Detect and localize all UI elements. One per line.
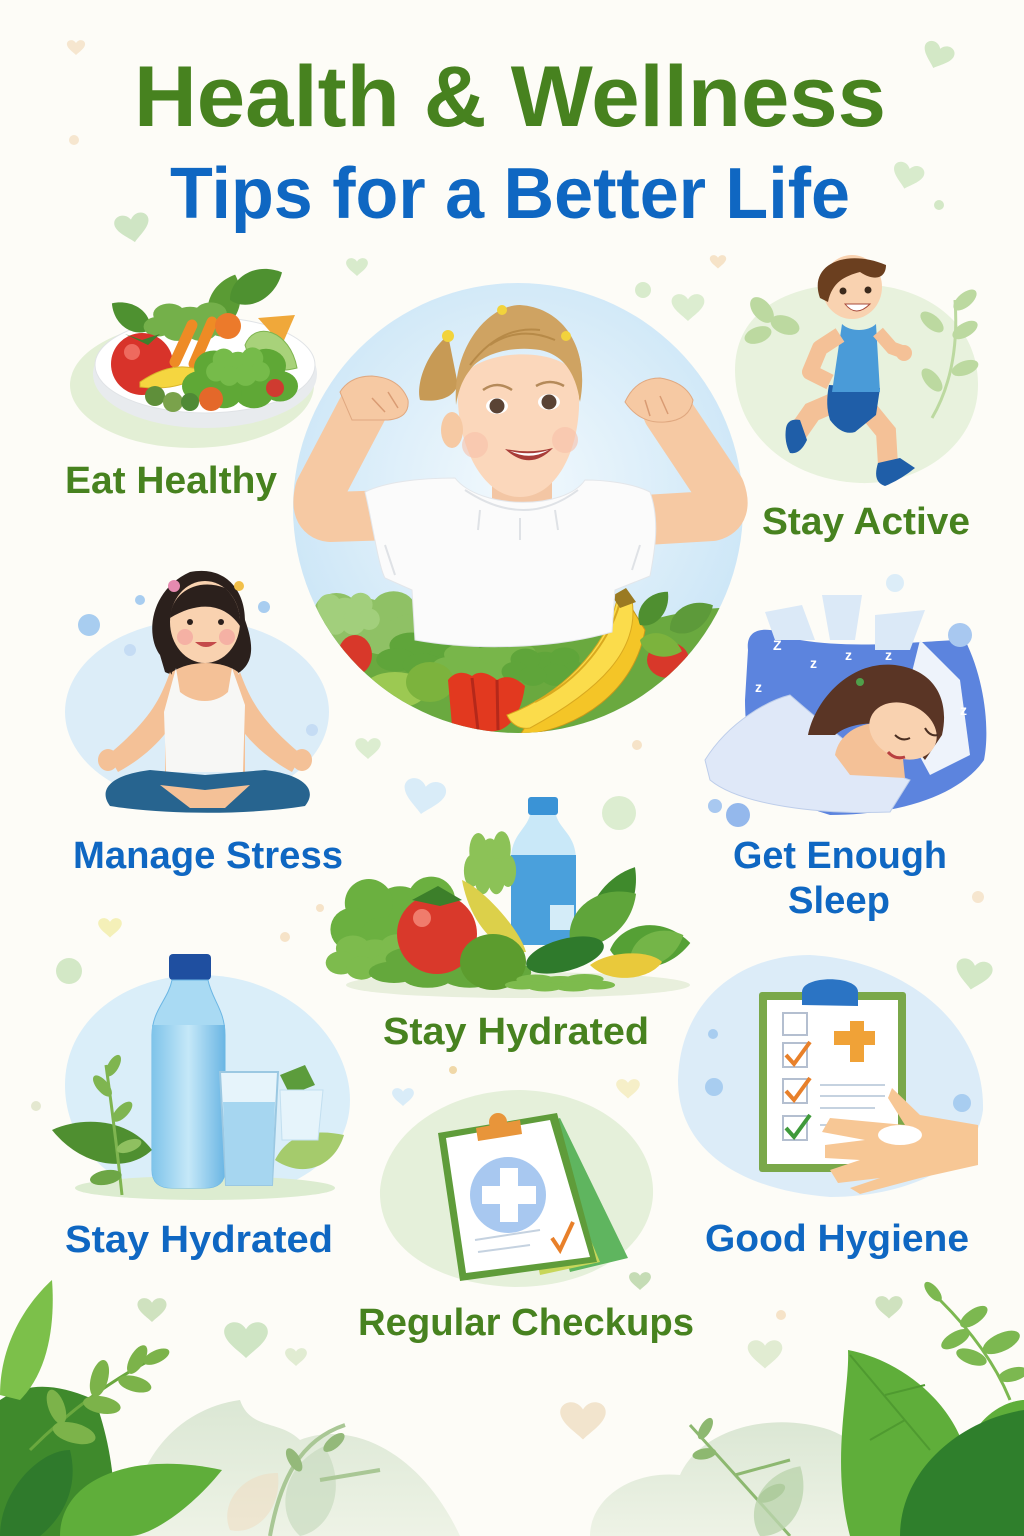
icon: glass	[220, 1072, 278, 1185]
neck	[492, 475, 552, 515]
icon: leaves	[742, 286, 981, 418]
panel: Get Enough Sleep: Z	[773, 637, 782, 653]
heading: Health & Wellness: Health & Wellness	[134, 49, 886, 145]
icon: water bottle	[511, 797, 576, 945]
panel: Stay Active	[735, 255, 981, 543]
label: Stay Hydrated left: Stay Hydrated	[65, 1219, 333, 1261]
panel: Get Enough Sleep	[705, 595, 986, 922]
label: Manage Stress: Manage Stress	[73, 835, 343, 877]
icon: hand washing	[822, 1088, 978, 1194]
icon: running boy	[786, 255, 915, 486]
panel: Stay Hydrated center	[326, 797, 692, 1053]
panel: Get Enough Sleep: z	[885, 647, 892, 663]
arms	[318, 410, 723, 520]
label: Stay Active: Stay Active	[762, 501, 970, 543]
label: Get Enough Sleep: Sleep	[788, 880, 890, 922]
label: Get Enough Sleep: Get Enough	[733, 835, 947, 877]
icon: plate of vegetables	[93, 258, 317, 428]
panel: central child with vegetables	[293, 283, 745, 740]
panel: Stay Hydrated left	[52, 954, 350, 1261]
icon: pillow and blanket	[705, 695, 910, 813]
panel: Eat Healthy	[65, 258, 317, 502]
icon: salad greens	[326, 831, 692, 992]
fists	[340, 376, 693, 422]
pigtails	[419, 335, 582, 405]
icon: plant leaves	[52, 1053, 344, 1195]
panel: Get Enough Sleep: z	[960, 702, 967, 718]
icon: meditating woman	[98, 571, 312, 813]
title	[134, 49, 886, 234]
panel: Good Hygiene	[678, 955, 983, 1260]
icon: sleeping girl	[808, 665, 946, 778]
face	[458, 354, 579, 497]
panel: Get Enough Sleep: z	[755, 679, 762, 695]
icon: clipboard	[759, 979, 906, 1172]
heading: Tips for a Better Life: Tips for a Better Life	[170, 154, 850, 234]
icon: large bottle	[152, 954, 225, 1188]
label: Good Hygiene: Good Hygiene	[705, 1218, 969, 1260]
label: Stay Hydrated center: Stay Hydrated	[383, 1011, 649, 1053]
hair	[456, 305, 582, 405]
label: Regular Checkups: Regular Checkups	[358, 1302, 694, 1344]
panel: Regular Checkups	[358, 1090, 694, 1344]
icon: stacked clipboards	[438, 1113, 628, 1281]
white shirt	[365, 478, 656, 647]
child figure	[318, 305, 723, 647]
panel: Get Enough Sleep: z	[845, 647, 852, 663]
panel: Get Enough Sleep: z	[810, 655, 817, 671]
foliage: bottom left	[0, 1280, 460, 1536]
foliage: bottom right	[590, 1279, 1024, 1536]
panel: Manage Stress	[65, 571, 343, 877]
icon: vegetables and bananas	[316, 588, 720, 733]
label: Eat Healthy: Eat Healthy	[65, 460, 277, 502]
